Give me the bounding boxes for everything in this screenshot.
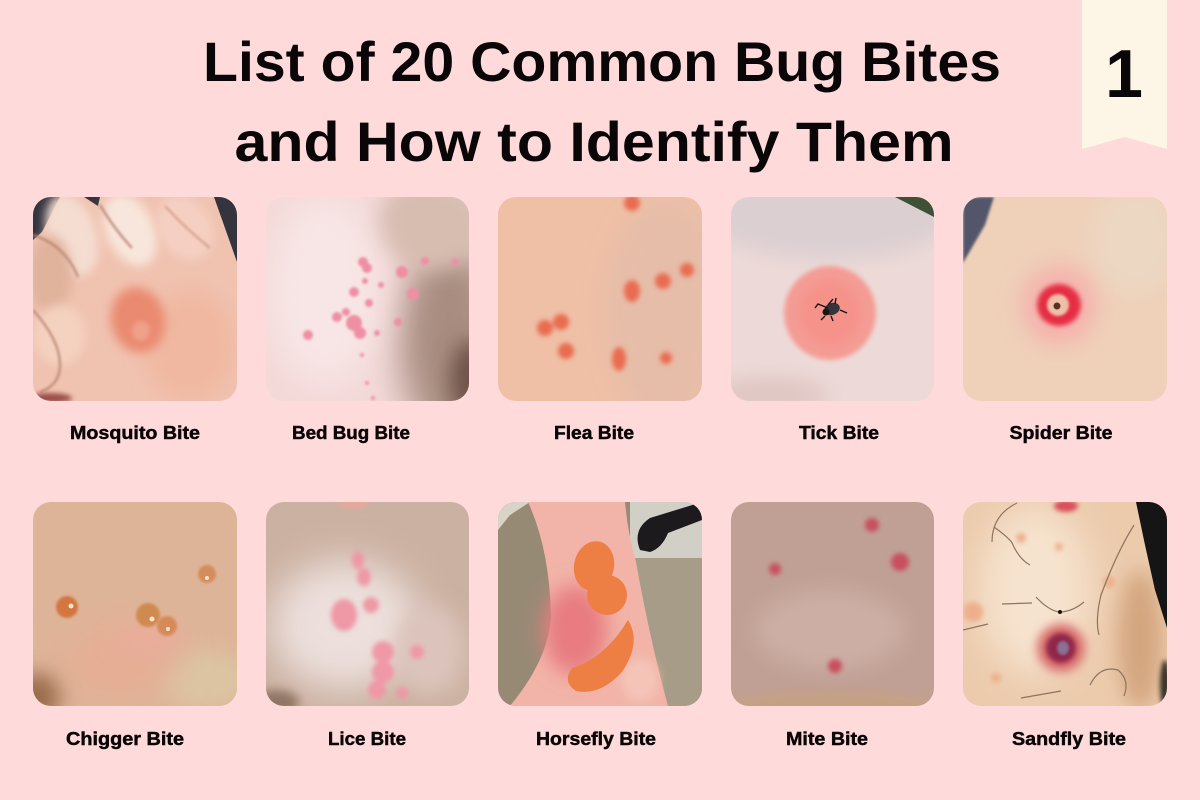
label: mosquito bite: Mosquito Bite	[70, 423, 200, 443]
title: List of 20 Common Bug Bites	[203, 30, 1001, 93]
panel: lice bite	[266, 502, 469, 706]
panel: chigger bite	[33, 502, 237, 706]
label: flea bite: Flea Bite	[554, 423, 634, 443]
panel: bed bug bite	[266, 197, 469, 401]
label: sandfly bite: Sandfly Bite	[1012, 729, 1126, 749]
panel: mosquito bite	[28, 185, 237, 403]
title: and How to Identify Them	[234, 110, 953, 173]
label: chigger bite: Chigger Bite	[66, 729, 184, 749]
label: tick bite: Tick Bite	[799, 423, 879, 443]
panel: horsefly bite	[498, 502, 702, 706]
label: spider bite: Spider Bite	[1010, 423, 1112, 443]
title	[203, 30, 1001, 173]
page number ribbon: 1	[1105, 36, 1143, 112]
label: horsefly bite: Horsefly Bite	[536, 729, 656, 749]
page number ribbon	[1082, 0, 1167, 149]
icon: tick	[815, 298, 847, 321]
label: mite bite: Mite Bite	[786, 729, 868, 749]
panel: tick bite	[731, 197, 934, 401]
label: bed bug bite: Bed Bug Bite	[292, 423, 410, 443]
blisters	[568, 537, 634, 692]
label: lice bite: Lice Bite	[328, 729, 406, 749]
panel: flea bite	[498, 197, 702, 401]
panel: sandfly bite	[963, 500, 1170, 710]
panel: mite bite	[730, 502, 934, 719]
panel: spider bite	[963, 197, 1167, 401]
